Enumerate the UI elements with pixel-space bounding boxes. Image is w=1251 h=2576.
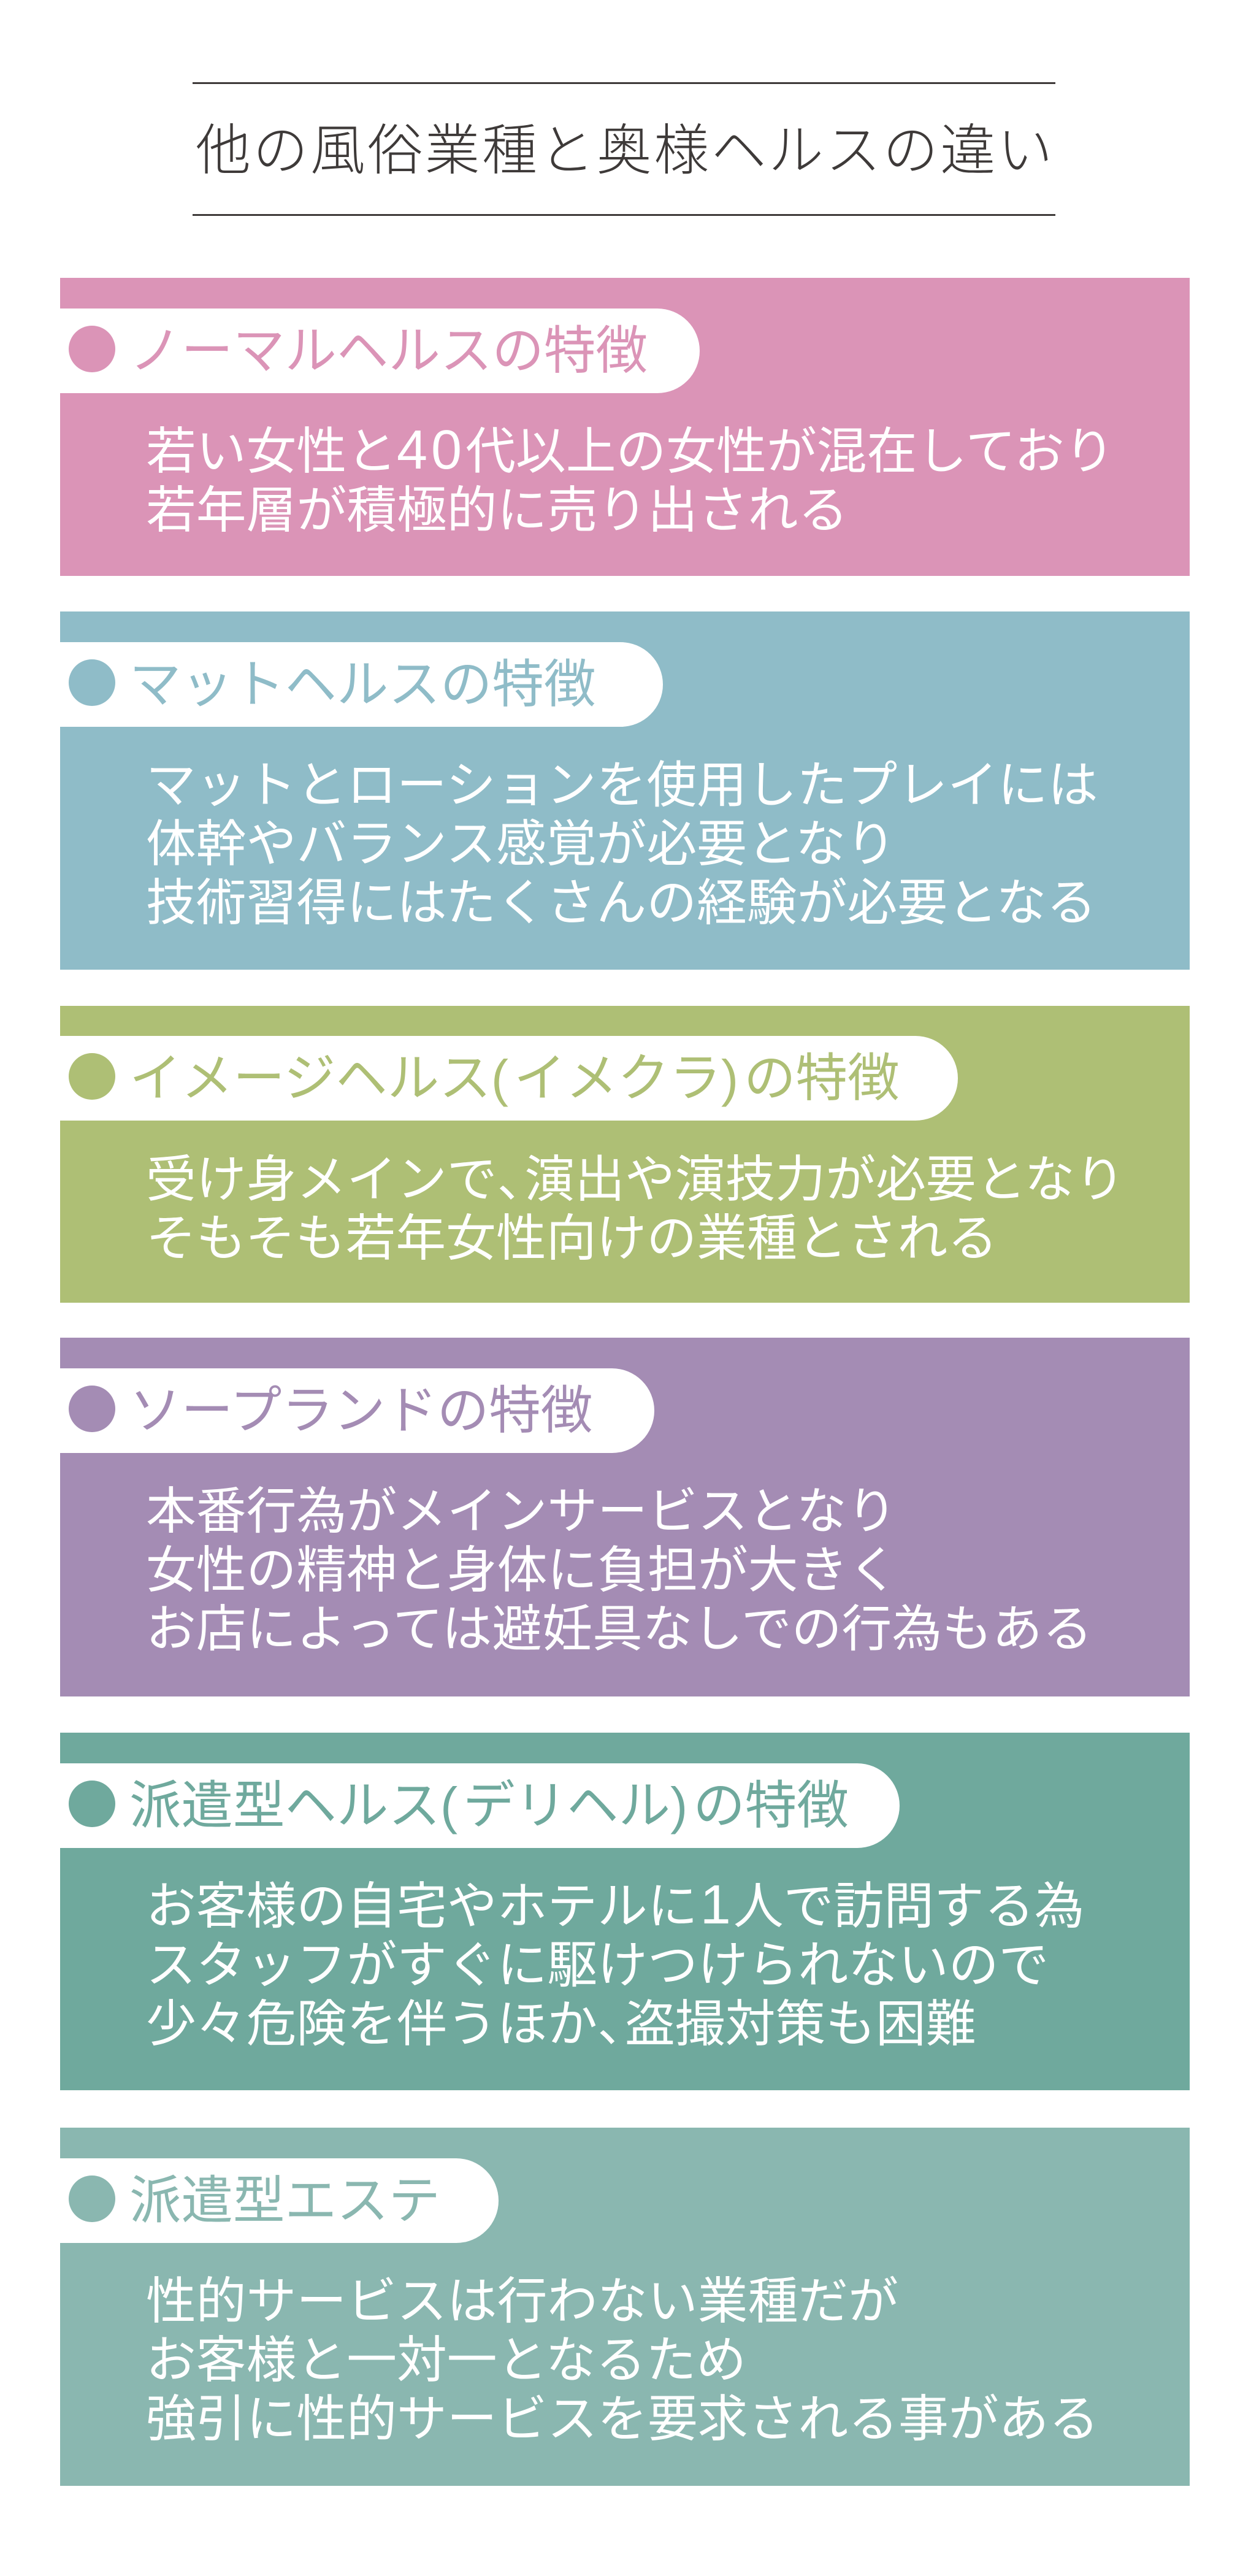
- text: delivery esthetic description: 強引に性的サービスを要求される事がある: [146, 2391, 1099, 2447]
- heading pill: soapland: [60, 1368, 654, 1453]
- heading: delivery health: 派遣型ヘルス(デリヘル)の特徴: [129, 1777, 849, 1834]
- text: soapland description: 女性の精神と身体に負担が大きく: [146, 1543, 898, 1598]
- title block: [193, 82, 1055, 216]
- icon: bullet dot: [69, 659, 115, 706]
- text: delivery health description: [146, 1874, 1084, 2052]
- text: soapland description: [146, 1484, 1093, 1657]
- icon: bullet dot: [69, 326, 115, 372]
- panel: mat health: [60, 611, 1190, 970]
- text: delivery health description: 少々危険を伴うほか、盗撮対策も困難: [146, 1996, 976, 2052]
- text: image health description: 受け身メインで、演出や演技力が必要となり: [146, 1152, 1125, 1208]
- heading: image health: イメージヘルス(イメクラ)の特徴: [129, 1049, 900, 1107]
- text: mat health description: マットとローションを使用したプレイには: [146, 757, 1098, 813]
- text: normal health description: 若い女性と40代以上の女性が混在しており: [146, 420, 1115, 481]
- text: mat health description: 技術習得にはたくさんの経験が必要となる: [146, 875, 1096, 931]
- text: normal health description: 若年層が積極的に売り出される: [146, 483, 848, 539]
- text: image health description: そもそも若年女性向けの業種とされる: [146, 1211, 998, 1267]
- heading: delivery esthetic: 派遣型エステ: [129, 2172, 440, 2229]
- icon: bullet dot: [69, 1053, 115, 1100]
- text: image health description: [146, 1152, 1125, 1267]
- text: normal health description: [146, 420, 1115, 539]
- panel: delivery health: [60, 1733, 1190, 2090]
- text: delivery health description: お客様の自宅やホテルに1人で訪問する為: [146, 1874, 1084, 1936]
- panel: soapland: [60, 1338, 1190, 1696]
- heading pill: image health: [60, 1036, 958, 1121]
- heading: soapland: ソープランドの特徴: [129, 1382, 592, 1439]
- text: soapland description: お店によっては避妊具なしでの行為もある: [146, 1601, 1093, 1657]
- heading pill: normal health: [60, 309, 700, 393]
- icon: bullet dot: [69, 1386, 115, 1432]
- text: mat health description: [146, 757, 1098, 931]
- title: 他の風俗業種と奥様ヘルスの違い: [196, 120, 1055, 182]
- icon: bullet dot: [69, 1781, 115, 1827]
- icon: bullet dot: [69, 2175, 115, 2222]
- panel: normal health: [60, 278, 1190, 576]
- text: delivery esthetic description: [146, 2274, 1099, 2447]
- heading: mat health: マットヘルスの特徴: [129, 656, 596, 713]
- heading pill: delivery health: [60, 1763, 900, 1848]
- panel: delivery esthetic: [60, 2128, 1190, 2486]
- heading pill: mat health: [60, 642, 663, 727]
- text: delivery esthetic description: 性的サービスは行わない業種だが: [146, 2274, 898, 2329]
- panel: image health: [60, 1006, 1190, 1303]
- text: soapland description: 本番行為がメインサービスとなり: [146, 1484, 897, 1539]
- heading: normal health: ノーマルヘルスの特徴: [129, 322, 648, 380]
- text: mat health description: 体幹やバランス感覚が必要となり: [146, 816, 896, 872]
- heading pill: delivery esthetic: [60, 2158, 499, 2243]
- text: delivery health description: スタッフがすぐに駆けつけられないので: [146, 1938, 1049, 1993]
- text: delivery esthetic description: お客様と一対一となるため: [146, 2333, 746, 2388]
